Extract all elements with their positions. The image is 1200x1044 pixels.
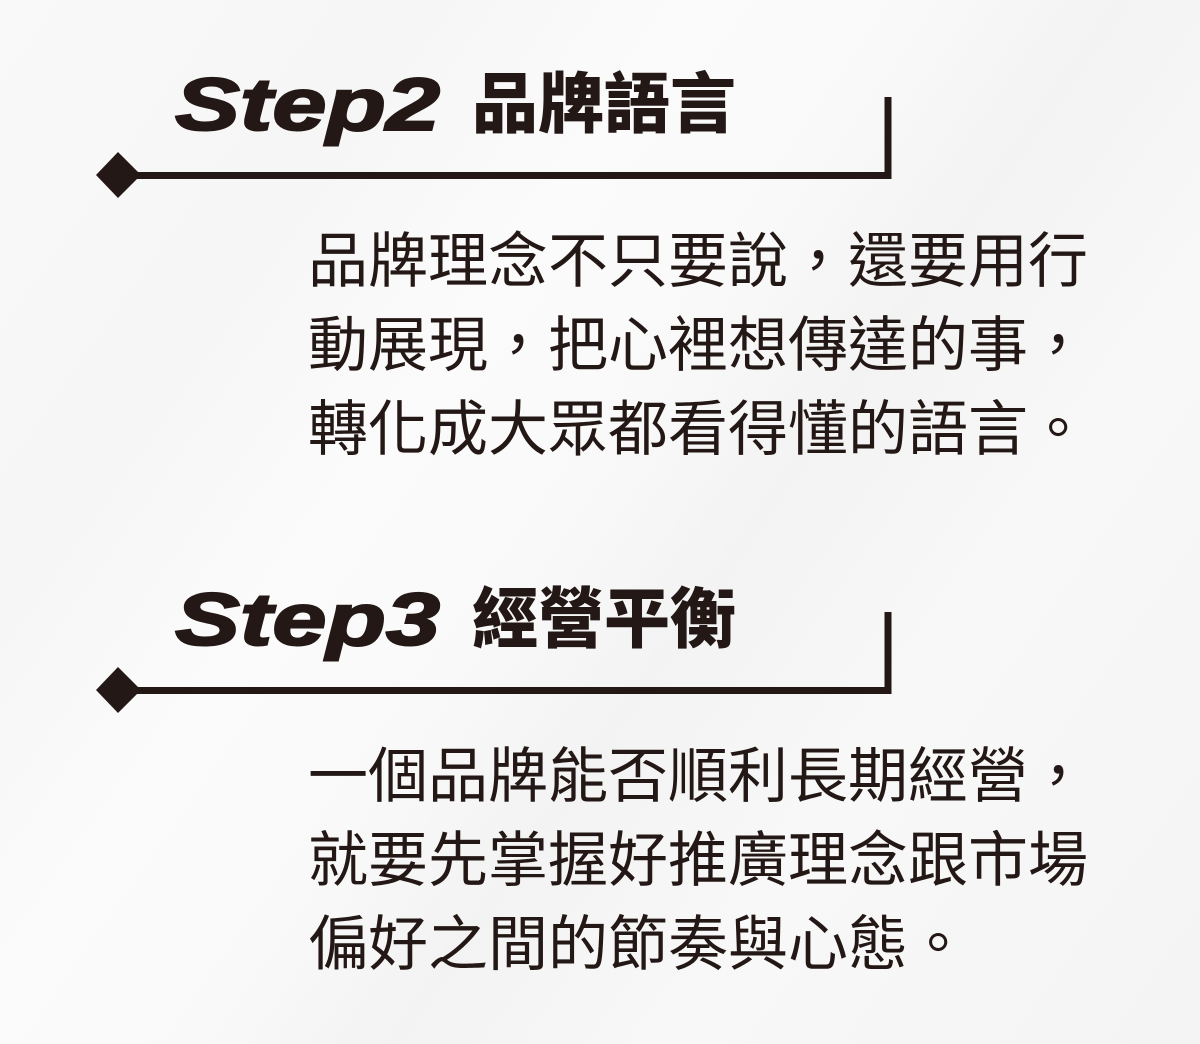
section: Step 3 header [96,566,892,713]
connector line with diamond [96,612,888,713]
text block: Step 2 body: 品牌理念不只要說，還要用行 [308,228,1088,295]
text block: Step 3 body [308,743,1088,978]
heading: Step2 品牌語言 [175,51,736,147]
section: Step 2 header [96,51,892,198]
connector line with diamond [96,97,888,198]
text block: Step 2 body: 轉化成大眾都看得懂的語言。 [308,396,1088,463]
text block: Step 3 body: 偏好之間的節奏與心態。 [308,911,968,978]
heading: Step2 品牌語言: Step2 [175,63,440,146]
heading: Step3 經營平衡: Step3 [175,578,440,661]
heading: Step3 經營平衡: 經營平衡 [472,566,736,662]
heading: Step2 品牌語言: 品牌語言 [472,51,736,147]
text block: Step 3 body: 一個品牌能否順利長期經營， [308,743,1088,810]
heading: Step3 經營平衡 [175,566,736,662]
text block: Step 2 body [308,228,1088,463]
text block: Step 3 body: 就要先掌握好推廣理念跟市場 [308,827,1088,894]
text block: Step 2 body: 動展現，把心裡想傳達的事， [308,312,1088,379]
